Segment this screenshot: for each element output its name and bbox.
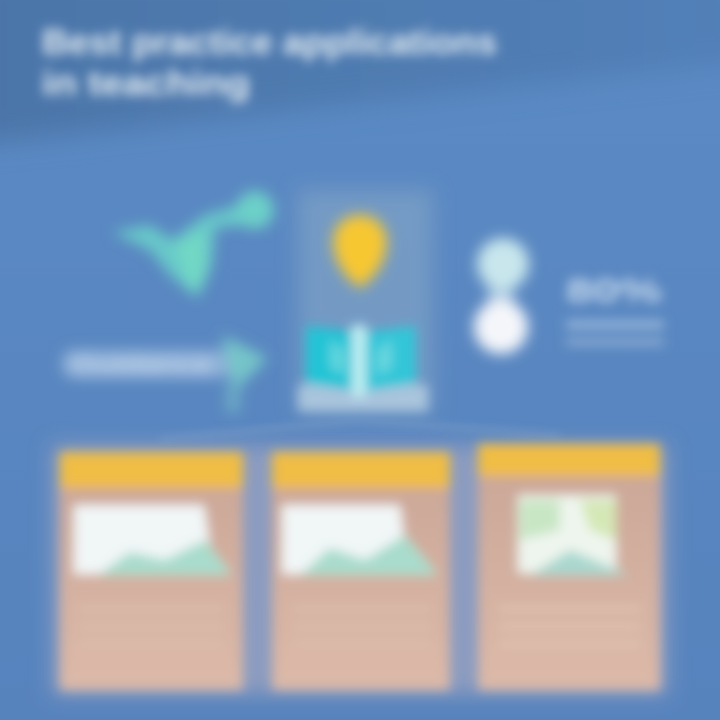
- card 1 text: [78, 606, 224, 647]
- arrow callout: Guidance: [72, 352, 212, 377]
- network diagram: [112, 191, 274, 298]
- header band: [0, 0, 720, 142]
- center panel: [298, 190, 433, 415]
- card 3 header: [478, 444, 660, 476]
- statistic text: [566, 272, 664, 346]
- title: in teaching: [42, 64, 250, 103]
- card 2 header: [272, 452, 450, 488]
- card 2 text: [292, 606, 432, 647]
- panel: card 1: [60, 452, 243, 690]
- card 1 image: [74, 505, 232, 575]
- card 2 image: [282, 505, 438, 575]
- panel: card 3: [478, 444, 660, 690]
- title: [42, 23, 497, 103]
- arrow callout: [62, 335, 268, 413]
- connector line: [160, 420, 560, 440]
- icon: two circles: [474, 238, 529, 354]
- statistic text: 80%: [566, 272, 662, 309]
- card 3 image: [518, 495, 630, 575]
- icon: lightbulb: [333, 215, 387, 288]
- icon: open book: [298, 325, 428, 411]
- title: Best practice applications: [42, 23, 497, 62]
- card 1 header: [60, 452, 243, 488]
- haze behind cards: [52, 445, 668, 695]
- panel: card 2: [272, 452, 450, 690]
- card 3 text: [498, 606, 642, 647]
